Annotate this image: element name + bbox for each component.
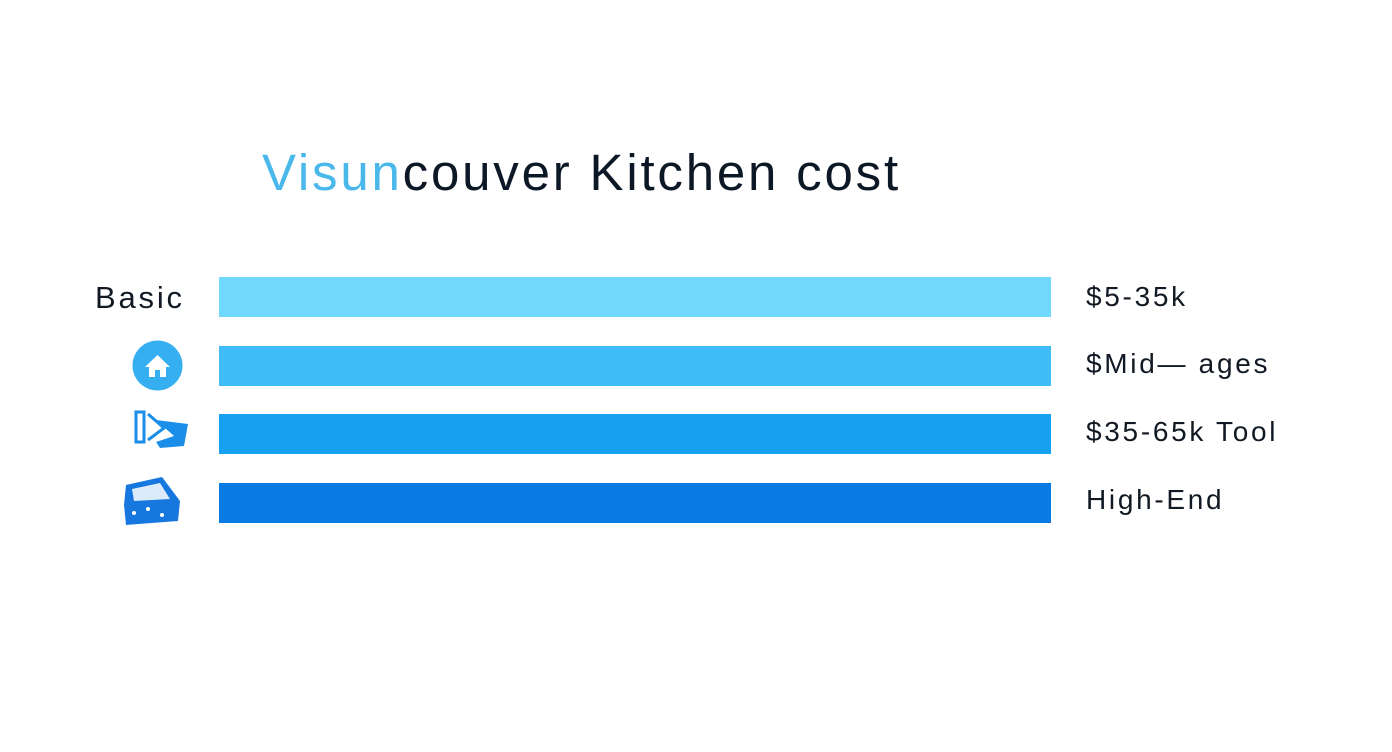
bar: 35-65k	[219, 414, 1051, 454]
value label 2: $Mid— ages	[1086, 348, 1270, 379]
bar: mid	[219, 346, 1051, 386]
icon: high-end	[124, 477, 180, 525]
label: Basic: Basic	[95, 280, 185, 315]
bar: basic	[219, 277, 1051, 317]
icon: tool	[134, 410, 188, 448]
value label 1: $5-35k	[1086, 281, 1188, 312]
value label 4: High-End	[1086, 484, 1224, 515]
title: Visuncouver Kitchen cost	[262, 144, 901, 201]
bar: high-end	[219, 483, 1051, 523]
value label 3: $35-65k Tool	[1086, 416, 1278, 447]
icon: house	[132, 340, 182, 390]
